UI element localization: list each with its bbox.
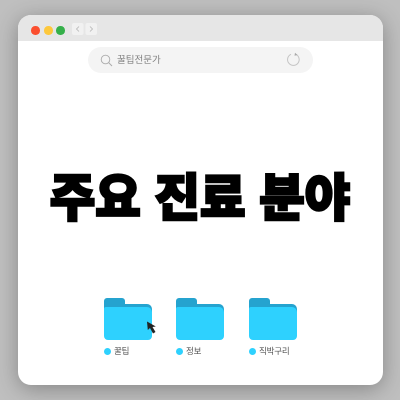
search text: 꿀팁전문가 [117, 55, 161, 66]
icon: reload [287, 52, 300, 66]
label: 정보 [176, 346, 201, 356]
window control buttons [31, 26, 65, 35]
label: 꿀팁: 꿀팁 [114, 346, 129, 356]
icon: magnifier [100, 54, 112, 66]
search bar [88, 47, 312, 72]
folder: 정보 [176, 298, 224, 340]
title: 주요 진료 분야 [50, 170, 350, 226]
navigation arrows [72, 23, 97, 35]
folder: 꿀팁 [104, 298, 152, 340]
label: 꿀팁 [104, 346, 129, 356]
title bar [18, 15, 382, 41]
label: 직박구리: 직박구리 [259, 346, 289, 356]
label: 정보: 정보 [186, 346, 201, 356]
folder: 직박구리 [249, 298, 297, 340]
icon: mouse cursor [147, 322, 156, 334]
